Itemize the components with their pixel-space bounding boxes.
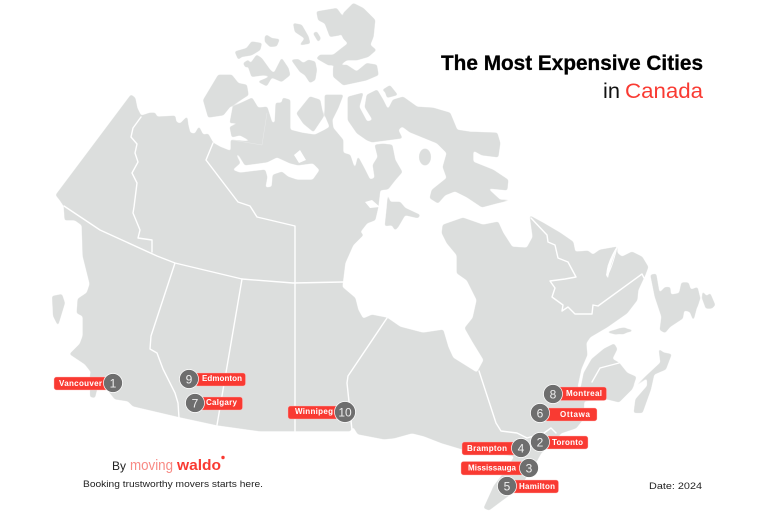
city: Vancouver 1: 1: [110, 376, 117, 390]
city: Brampton 4: Brampton: [467, 444, 507, 453]
Prince Charles Island: [419, 148, 431, 166]
city: Winnipeg 10: 10: [338, 406, 352, 420]
Haida Gwaii and Vancouver Island: [52, 294, 100, 398]
city: Winnipeg 10: [288, 402, 356, 422]
city: Edmonton 9: Edmonton: [202, 374, 242, 383]
logo: By moving waldo: [112, 456, 225, 474]
city: Calgary 7: Calgary: [206, 398, 238, 407]
city: Ottawa 6: Ottawa: [560, 410, 591, 419]
city: Calgary 7: 7: [192, 396, 199, 410]
Baffin Island: [348, 90, 510, 207]
provincial borders: [64, 113, 644, 438]
city: Montreal 8: Montreal: [566, 389, 602, 398]
title: The Most Expensive Cities: [441, 52, 703, 75]
city: Calgary 7: [186, 394, 242, 412]
tagline: Booking trustworthy movers starts here.: [83, 479, 263, 490]
city: Mississauga 3: 3: [526, 462, 533, 476]
logo: By moving waldo: waldo: [176, 457, 221, 474]
mainland: [56, 95, 648, 510]
Newfoundland: [608, 274, 715, 334]
logo: By moving waldo: moving: [130, 458, 173, 474]
city: Toronto 2: [530, 432, 588, 452]
city: Vancouver 1: [54, 374, 122, 392]
city: Winnipeg 10: Winnipeg: [295, 407, 333, 416]
Nova Scotia and Prince Edward Island: [608, 328, 671, 413]
city: Toronto 2: Toronto: [552, 438, 583, 447]
city: Hamilton 5: Hamilton: [519, 482, 555, 491]
city: Brampton 4: 4: [518, 442, 525, 456]
city: Vancouver 1: Vancouver: [59, 379, 102, 388]
city: Brampton 4: [462, 438, 530, 458]
Southampton Island: [385, 195, 420, 230]
city: Hamilton 5: [498, 476, 558, 496]
city: Edmonton 9: 9: [186, 372, 193, 386]
arctic islands: [203, 3, 378, 132]
city: Edmonton 9: [180, 370, 246, 388]
city: Montreal 8: [544, 384, 606, 404]
date: Date: 2024: [649, 481, 702, 492]
city: Hamilton 5: 5: [504, 480, 511, 494]
title: Canada: [625, 80, 703, 103]
city: Toronto 2: 2: [537, 436, 544, 450]
title: [441, 52, 703, 103]
city: Montreal 8: 8: [550, 388, 557, 402]
Bylot Island: [382, 85, 398, 98]
city: Mississauga 3: [461, 458, 538, 478]
water cut-outs: [269, 150, 617, 278]
city: Ottawa 6: [530, 404, 597, 422]
city: Ottawa 6: 6: [537, 406, 544, 420]
title: in: [603, 80, 620, 103]
logo: By moving waldo: By: [112, 459, 126, 473]
city: Mississauga 3: Mississauga: [468, 464, 517, 472]
